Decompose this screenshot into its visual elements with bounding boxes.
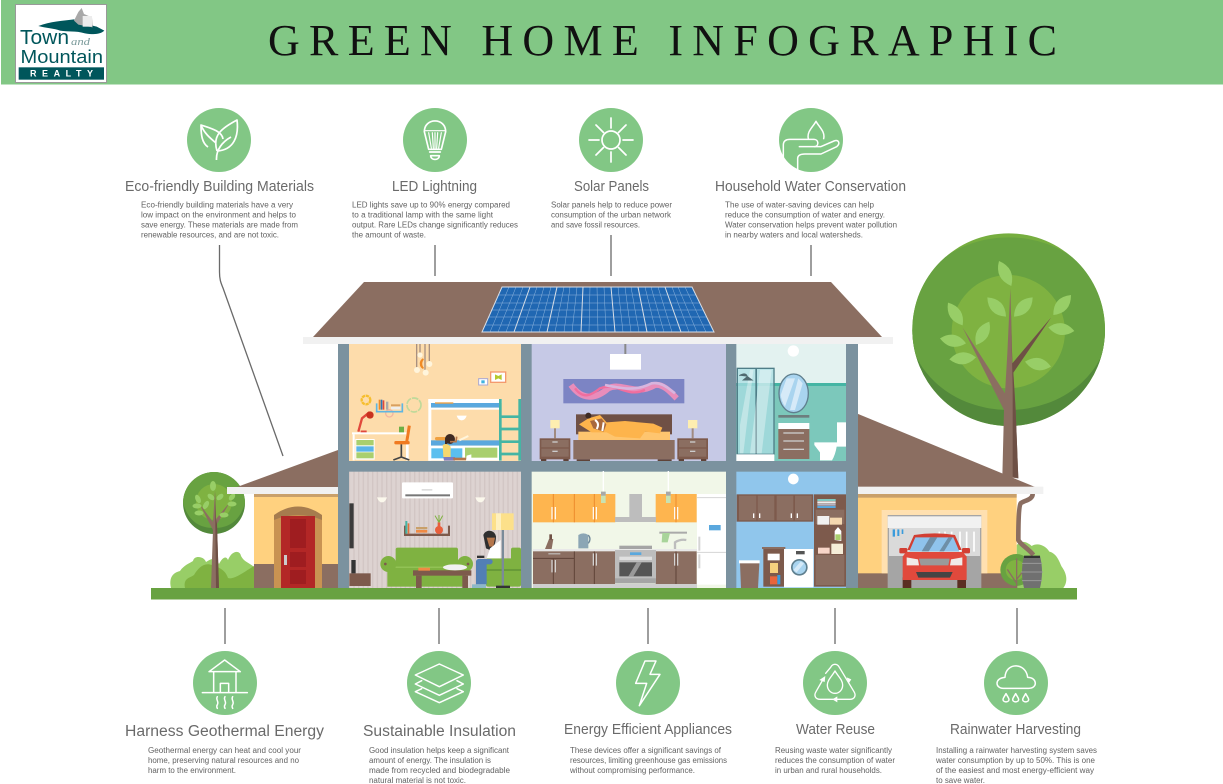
panel: geothermal energy bbox=[125, 651, 324, 775]
text block: Water conservation helps prevent water pollution bbox=[725, 220, 897, 230]
icon: leaves bbox=[187, 108, 251, 172]
text block: These devices offer a significant savings of bbox=[570, 746, 722, 755]
television bbox=[349, 503, 354, 548]
text block: save energy. These materials are made from bbox=[141, 220, 298, 230]
text block: Solar panels help to reduce power bbox=[551, 200, 672, 210]
panel: eco-friendly building materials bbox=[125, 108, 314, 240]
text block bbox=[569, 746, 727, 775]
wall flowers bbox=[362, 396, 421, 417]
upper cabinets bbox=[737, 494, 813, 522]
small tree and bushes bbox=[170, 472, 254, 588]
bushes bbox=[170, 552, 254, 588]
text block bbox=[352, 200, 518, 240]
car bbox=[899, 533, 970, 588]
sleeping person bbox=[579, 413, 662, 438]
heading: Sustainable Insulation bbox=[363, 723, 516, 740]
text block bbox=[141, 200, 298, 240]
rain barrel bbox=[1021, 556, 1043, 588]
heading: Energy Efficient Appliances bbox=[564, 722, 732, 738]
small shelf bbox=[762, 547, 785, 587]
door bbox=[274, 506, 322, 588]
heading: Solar Panels bbox=[574, 179, 649, 195]
wall shelf bbox=[404, 515, 450, 536]
arrow: leader lines bbox=[220, 235, 1017, 644]
air conditioner bbox=[402, 482, 453, 498]
heading: Eco-friendly Building Materials bbox=[125, 179, 314, 195]
house frame bbox=[338, 344, 858, 588]
sofa bbox=[380, 548, 473, 587]
ladder bbox=[500, 399, 520, 461]
heading: Household Water Conservation bbox=[715, 179, 906, 195]
text block bbox=[369, 746, 511, 784]
small garden tree bbox=[1000, 554, 1032, 588]
text block: Reusing waste water significantly bbox=[775, 746, 892, 755]
text block: Good insulation helps keep a significant bbox=[369, 746, 510, 755]
upper cabinets bbox=[533, 494, 697, 522]
text block bbox=[551, 200, 672, 230]
wall sconces bbox=[377, 497, 485, 502]
floor lamp bbox=[492, 513, 514, 588]
tall shelving with towels bbox=[814, 494, 846, 587]
text block: LED lights save up to 90% energy compared bbox=[352, 200, 510, 210]
big tree bbox=[909, 233, 1110, 478]
room: kitchen bbox=[532, 471, 726, 588]
text block: Geothermal energy can heat and cool your bbox=[148, 746, 301, 755]
text block: home, preserving natural resources and no bbox=[148, 756, 300, 765]
shower bbox=[736, 368, 774, 461]
room: bathroom bbox=[736, 344, 846, 461]
text block: the amount of waste. bbox=[352, 230, 426, 240]
text block bbox=[725, 200, 897, 240]
book shelf bbox=[377, 400, 402, 412]
icon: house over heat waves bbox=[193, 651, 257, 715]
text block: renewable resources, and are not toxic. bbox=[141, 230, 279, 240]
text block: resources, limiting greenhouse gas emissions bbox=[570, 756, 727, 765]
wall bbox=[857, 493, 1017, 588]
lower cabinets bbox=[533, 551, 697, 584]
text block: water consumption by up to 50%. This is one bbox=[935, 756, 1096, 765]
roof bbox=[857, 413, 1036, 487]
title: GREEN HOME INFOGRAPHIC bbox=[268, 16, 1057, 65]
panel: energy efficient appliances bbox=[564, 651, 732, 775]
panel: household water conservation bbox=[715, 108, 906, 240]
solar panel array bbox=[482, 287, 714, 332]
room: kids bedroom bbox=[349, 344, 521, 461]
room: bedroom bbox=[532, 344, 726, 461]
toilet bbox=[814, 422, 846, 460]
panel: LED lightning bbox=[352, 108, 518, 240]
text block: Eco-friendly building materials have a very bbox=[141, 200, 293, 210]
heading: Rainwater Harvesting bbox=[950, 722, 1081, 738]
bunk bed bbox=[428, 399, 502, 461]
icon: rain cloud bbox=[984, 651, 1048, 715]
pendant lamps bbox=[601, 471, 671, 503]
left wing with red door bbox=[227, 450, 339, 588]
nightstands bbox=[540, 420, 708, 461]
mirror bbox=[778, 374, 809, 418]
armchair bbox=[486, 548, 521, 587]
room: laundry bbox=[736, 472, 846, 588]
wall pictures bbox=[479, 372, 506, 385]
logo bbox=[16, 4, 106, 82]
icon: light bulb bbox=[403, 108, 467, 172]
right wing with garage bbox=[857, 413, 1066, 588]
counter items bbox=[545, 532, 687, 549]
text block bbox=[775, 746, 895, 775]
logo: Mountain bbox=[20, 47, 103, 67]
panel: water reuse bbox=[775, 651, 895, 775]
coffee table bbox=[413, 564, 471, 588]
bush bbox=[1017, 542, 1066, 588]
text block: reduce the consumption of water and energy. bbox=[725, 210, 885, 220]
laundry basket bbox=[739, 560, 760, 588]
logo: Town bbox=[20, 27, 69, 49]
text block: without compromising performance. bbox=[569, 766, 695, 775]
fridge bbox=[697, 494, 726, 585]
logo: and bbox=[71, 37, 91, 48]
text block: amount of energy. The insulation is bbox=[369, 756, 491, 765]
ceiling lamp bbox=[788, 345, 799, 357]
heading: Water Reuse bbox=[796, 722, 875, 738]
text block bbox=[935, 746, 1097, 784]
media unit bbox=[349, 560, 371, 586]
roof eave bbox=[303, 337, 893, 344]
panel: rainwater harvesting bbox=[935, 651, 1097, 784]
heading: Harness Geothermal Energy bbox=[125, 723, 324, 740]
drainpipe bbox=[1018, 494, 1033, 555]
wall painting bbox=[563, 379, 684, 403]
text block: output. Rare LEDs change significantly reduces bbox=[352, 220, 518, 230]
text block: reduces the consumption of water bbox=[775, 756, 895, 765]
room: living room bbox=[349, 472, 521, 588]
logo: REALTY bbox=[30, 69, 93, 79]
ceiling lamp bbox=[788, 474, 799, 484]
text block: in urban and rural households. bbox=[775, 766, 882, 775]
stove bbox=[615, 546, 656, 583]
ceiling lamp bbox=[610, 344, 641, 370]
text block: Installing a rainwater harvesting system saves bbox=[936, 746, 1097, 755]
hanging star mobile bbox=[414, 344, 432, 376]
desk bbox=[352, 427, 409, 460]
panel: solar panels bbox=[551, 108, 672, 230]
vanity bbox=[778, 423, 809, 459]
text block: made from recycled and biodegradable bbox=[369, 766, 511, 775]
washing machine bbox=[784, 549, 813, 587]
text block bbox=[148, 746, 301, 775]
text block: in nearby waters and local watersheds. bbox=[725, 230, 863, 240]
text block: harm to the environment. bbox=[148, 766, 236, 775]
text block: consumption of the urban network bbox=[551, 210, 672, 220]
desk lamp bbox=[358, 412, 369, 432]
panel: sustainable insulation bbox=[363, 651, 516, 784]
text block: and save fossil resources. bbox=[551, 220, 640, 230]
icon: hand and water drop bbox=[779, 108, 843, 172]
icon: sun bbox=[579, 108, 643, 172]
main roof bbox=[313, 282, 882, 337]
text block: of the easiest and most energy-efficient way bbox=[936, 766, 1094, 775]
chair bbox=[393, 426, 410, 460]
icon: lightning bolt bbox=[616, 651, 680, 715]
garage bbox=[882, 510, 987, 588]
text block: low impact on the environment and helps to bbox=[141, 210, 297, 220]
heading: LED Lightning bbox=[392, 179, 477, 195]
range hood bbox=[615, 494, 656, 522]
header banner bbox=[1, 0, 1223, 84]
bed bbox=[573, 413, 675, 461]
text block: The use of water-saving devices can help bbox=[725, 200, 875, 210]
text block: to a traditional lamp with the same light bbox=[352, 210, 494, 220]
icon: insulation layers bbox=[407, 651, 471, 715]
woman with phone bbox=[472, 531, 501, 588]
child bbox=[443, 434, 471, 461]
icon: recycling water drop bbox=[803, 651, 867, 715]
ground bbox=[151, 588, 1077, 600]
